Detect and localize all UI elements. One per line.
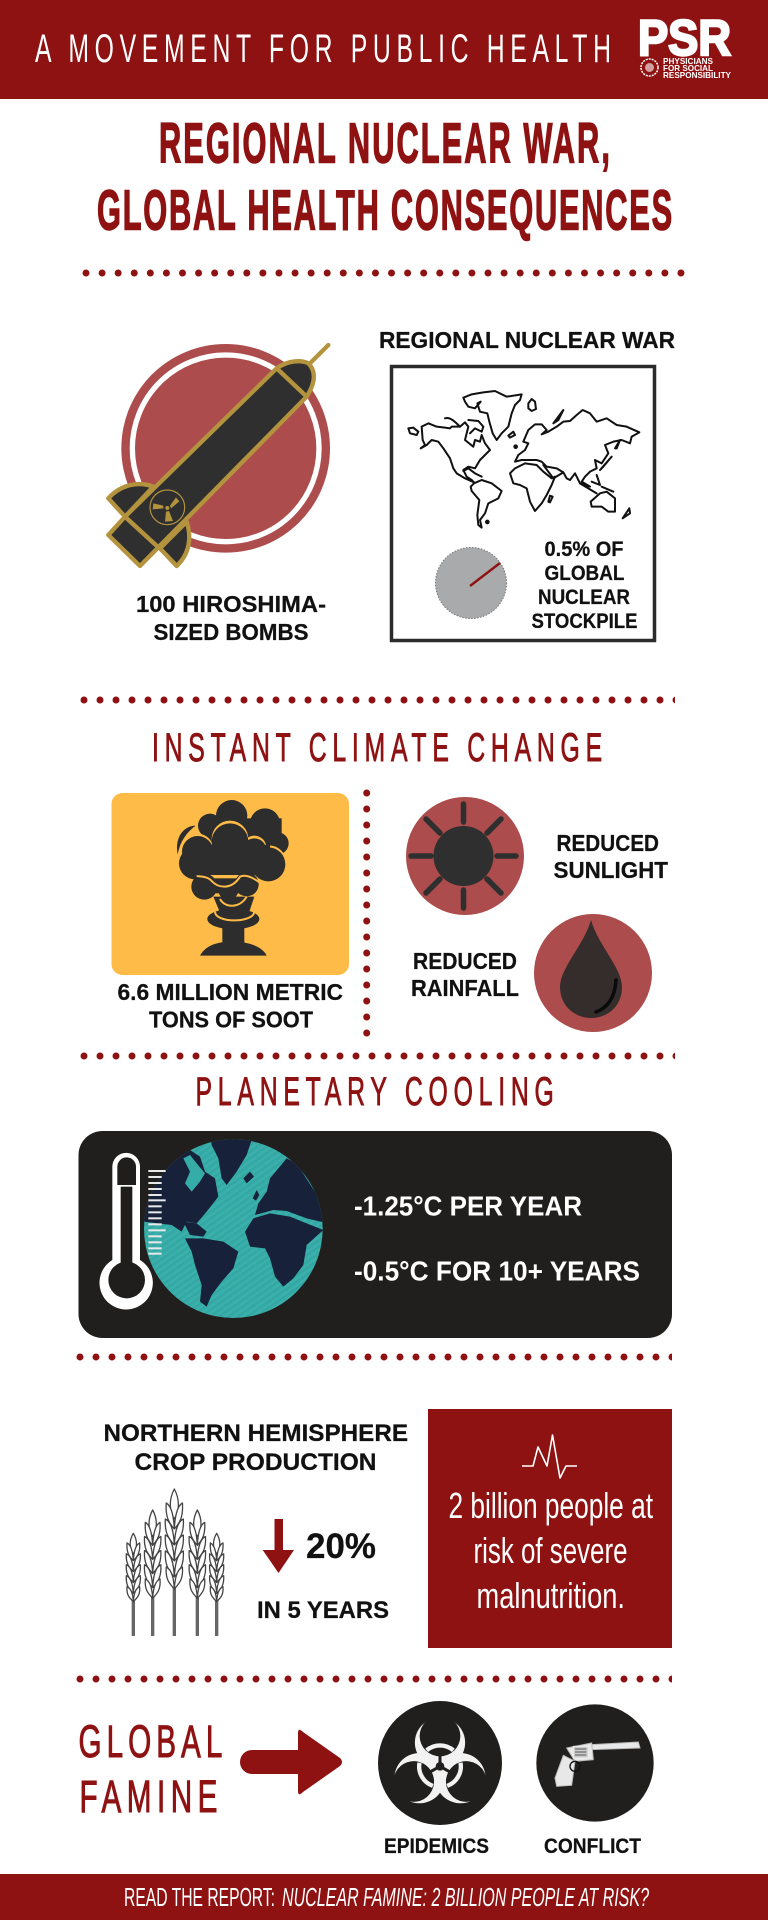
callout text	[448, 1485, 653, 1616]
labels: epidemics and conflict	[384, 1835, 641, 1858]
footer banner: READ THE REPORT:	[124, 1882, 275, 1912]
icon: reduced sunlight	[406, 797, 524, 915]
label: 6.6 million metric tons of soot	[118, 979, 343, 1032]
heading: crop production: NORTHERN HEMISPHERE	[104, 1420, 408, 1447]
label: 0.5% of global nuclear stockpile	[532, 538, 638, 633]
heading: global famine	[78, 1717, 222, 1823]
heading: crop production: CROP PRODUCTION	[134, 1449, 376, 1476]
icon: revolver	[536, 1704, 654, 1822]
callout text: risk of severe	[474, 1530, 628, 1571]
label: 6.6 million metric tons of soot: 6.6 MILLION METRIC	[118, 979, 343, 1005]
stat: 20 percent: 20%	[306, 1527, 376, 1566]
label: reduced rainfall	[411, 948, 519, 1001]
front cloud	[179, 823, 285, 881]
title: GLOBAL HEALTH CONSEQUENCES	[97, 178, 672, 242]
icon: down arrow	[263, 1519, 294, 1573]
labels: epidemics and conflict: EPIDEMICS	[384, 1835, 489, 1858]
label: 100 Hiroshima-sized bombs	[136, 591, 326, 645]
label: reduced rainfall: RAINFALL	[411, 975, 519, 1001]
icon: reduced rainfall	[534, 914, 652, 1032]
yellow rim of front cloud	[182, 821, 286, 879]
heading: regional nuclear war: REGIONAL NUCLEAR WAR	[379, 327, 675, 353]
world map outline	[408, 391, 639, 528]
header banner	[0, 0, 768, 99]
label: 0.5% of global nuclear stockpile: STOCKPILE	[532, 610, 638, 633]
callout text: malnutrition.	[476, 1575, 625, 1616]
label: 0.5% of global nuclear stockpile: NUCLEAR	[538, 586, 630, 609]
panel: planetary cooling	[78, 1131, 672, 1338]
labels: epidemics and conflict: CONFLICT	[544, 1835, 641, 1858]
label: 0.5% of global nuclear stockpile: GLOBAL	[544, 562, 625, 585]
label: reduced sunlight: SUNLIGHT	[554, 857, 668, 883]
callout: malnutrition	[428, 1409, 672, 1648]
label: reduced sunlight: REDUCED	[556, 830, 659, 856]
heading: crop production	[104, 1420, 408, 1476]
lower cloud	[191, 872, 259, 900]
label: 0.5% of global nuclear stockpile: 0.5% OF	[544, 538, 624, 561]
PSR logo: PHYSICIANS	[663, 56, 713, 66]
icon: bomb on red circle	[108, 344, 330, 566]
heading: planetary cooling: PLANETARY COOLING	[196, 1070, 554, 1115]
pie: 0.5 percent	[436, 548, 506, 618]
label: reduced sunlight	[554, 830, 668, 883]
icon: biohazard	[378, 1701, 502, 1825]
label: 100 Hiroshima-sized bombs: 100 HIROSHIMA-	[136, 591, 326, 617]
stat: cooling figures	[354, 1190, 640, 1286]
icon: wheat	[126, 1489, 224, 1636]
title: REGIONAL NUCLEAR WAR,	[159, 111, 610, 175]
back cloud	[177, 800, 289, 854]
heading: instant climate change: INSTANT CLIMATE CHANGE	[152, 726, 602, 771]
PSR logo: FOR SOCIAL	[663, 63, 713, 73]
callout text: 2 billion people at	[448, 1485, 653, 1526]
icon: mushroom cloud	[177, 800, 289, 956]
arrow: famine to outcomes	[240, 1730, 342, 1794]
label: reduced rainfall: REDUCED	[413, 948, 517, 974]
heading: global famine: FAMINE	[80, 1772, 217, 1823]
icon: pulse line	[522, 1435, 577, 1478]
heading: global famine: GLOBAL	[78, 1717, 222, 1768]
stat: cooling figures: -1.25°C PER YEAR	[354, 1190, 582, 1222]
title	[97, 111, 672, 242]
icon: globe and thermometer	[99, 1135, 323, 1318]
panel: soot	[112, 793, 349, 975]
PSR logo: PSR	[638, 10, 731, 66]
panel: world map and stockpile	[392, 366, 654, 640]
PSR logo: RESPONSIBILITY	[663, 70, 731, 80]
label: 100 Hiroshima-sized bombs: SIZED BOMBS	[154, 619, 308, 645]
footer banner	[0, 1874, 768, 1920]
stat: cooling figures: -0.5°C FOR 10+ YEARS	[354, 1256, 640, 1286]
label: 6.6 million metric tons of soot: TONS OF SOOT	[149, 1006, 313, 1032]
label: in 5 years: IN 5 YEARS	[257, 1597, 389, 1624]
header tagline: A MOVEMENT FOR PUBLIC HEALTH	[35, 27, 611, 72]
